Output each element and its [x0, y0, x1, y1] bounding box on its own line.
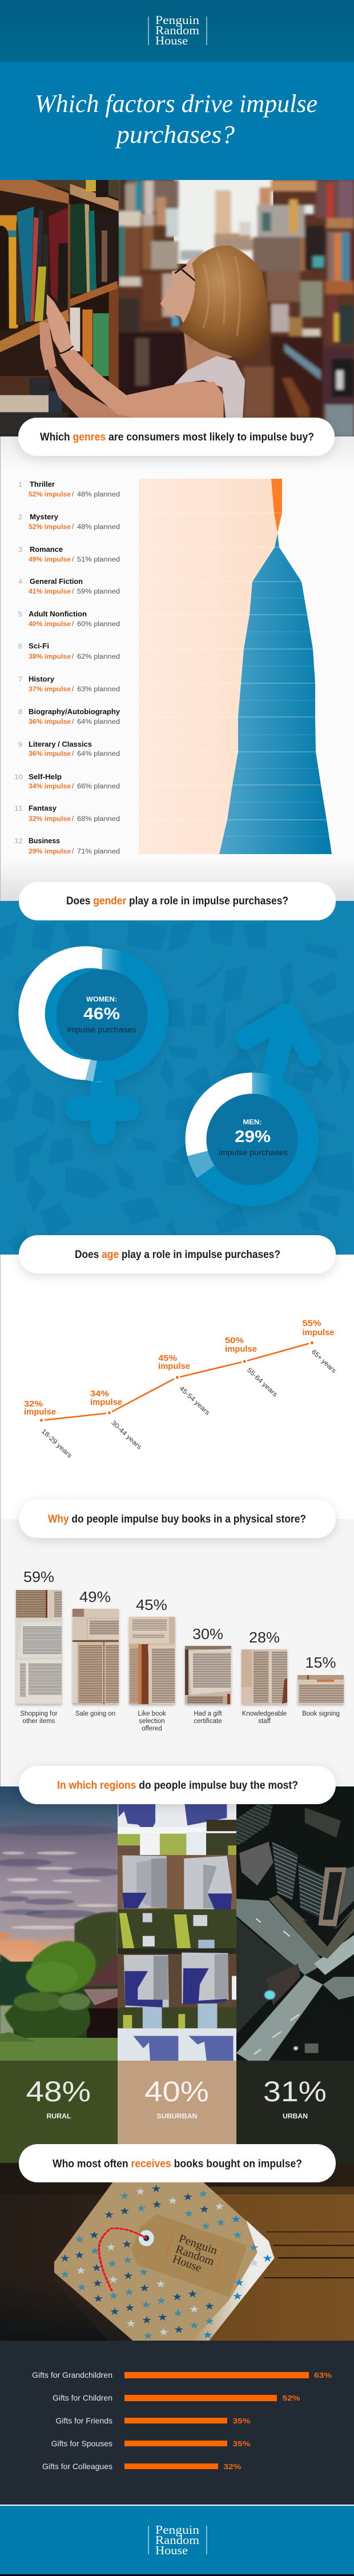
bar: selection 45%: offered	[142, 1725, 162, 1732]
bar: grandchildren: Gifts for Grandchildren	[32, 2370, 112, 2379]
genre 7: History	[29, 675, 55, 683]
photo bar chart: reasons	[16, 1568, 344, 1732]
panel: recipients	[0, 2341, 354, 2505]
genre 9: Literary / Classics	[29, 740, 92, 748]
tag text: Penguin	[177, 2232, 219, 2257]
stat: urban: 31%	[263, 2076, 327, 2108]
heading pill: genres	[18, 418, 335, 456]
genre 1: 52% impulse	[29, 491, 71, 498]
genre 5: /	[72, 621, 74, 628]
point labels: impulse	[158, 1362, 190, 1371]
woman: hair	[178, 246, 270, 363]
genre 10	[14, 772, 120, 790]
bar: gift 30%: certificate	[194, 1718, 222, 1725]
bar: selection 45%: 45%	[136, 1596, 167, 1613]
bar: friends: 35%	[233, 2417, 251, 2425]
woman: arms	[48, 367, 134, 418]
heading pill: age: Does age play a role in impulse purchases?	[75, 1248, 280, 1261]
driveways	[118, 2008, 236, 2009]
bar: staff 28%: staff	[258, 1718, 271, 1725]
stat: rural: RURAL	[47, 2112, 71, 2120]
genre 6: 6	[18, 642, 22, 650]
age axis labels: 18-29 years	[40, 1428, 73, 1460]
genre 8: Biography/Autobiography	[29, 707, 120, 716]
genre 5: Adult Nonfiction	[29, 610, 87, 618]
point labels: 45%	[158, 1354, 177, 1363]
roads	[236, 1899, 325, 1975]
header band	[0, 0, 354, 62]
point labels: 55%	[303, 1319, 321, 1328]
genre 1: 48% planned	[77, 491, 120, 498]
bar: signing 15%: Book signing	[302, 1710, 340, 1717]
bar: shopping 59%: 59%	[23, 1568, 54, 1585]
bar: staff 28%: 28%	[249, 1629, 280, 1646]
heading pill: gender: Does gender play a role in impulse purchases?	[66, 895, 288, 907]
genre 11: /	[72, 816, 74, 823]
heading pill: why	[19, 1500, 336, 1538]
genre 2	[18, 512, 120, 531]
twine	[99, 2228, 146, 2290]
genre 9: 64% planned	[77, 751, 120, 758]
men label: 29%	[235, 1128, 271, 1146]
genre 3: 3	[18, 546, 22, 554]
photo: woman browsing bookshelf	[0, 180, 354, 437]
photo: suburban houses	[118, 1786, 236, 2061]
genre 10: 34% impulse	[29, 783, 71, 790]
genre 2: /	[72, 524, 74, 531]
genre 12: 71% planned	[77, 848, 120, 855]
point labels: impulse	[303, 1328, 335, 1337]
genre 12: 29% impulse	[29, 848, 71, 855]
bar: friends: Gifts for Friends	[55, 2416, 112, 2425]
footer logo: Penguin	[155, 2523, 200, 2537]
age axis labels: 65+ years	[310, 1348, 337, 1375]
genre 10: Self-Help	[29, 772, 62, 781]
genre 5: 40% impulse	[29, 621, 71, 628]
genre 4: /	[72, 588, 74, 595]
heading pill: age	[19, 1235, 336, 1273]
blurred mid and far shelves	[118, 180, 354, 437]
house top right	[184, 1856, 232, 1909]
house bottom right	[182, 1953, 228, 2004]
bar: gift 30%: Had a gift	[194, 1710, 222, 1717]
tag text	[172, 2234, 216, 2271]
bar: friends	[55, 2416, 251, 2425]
panel: why section	[0, 1255, 354, 1786]
bar: selection 45%: Like book	[138, 1710, 166, 1717]
female gender symbol with donut	[18, 946, 168, 1145]
bar: shopping 59%: Shopping for	[20, 1710, 58, 1717]
male gender symbol with donut	[185, 1015, 319, 1207]
bar: spouses	[51, 2439, 251, 2448]
facade	[269, 1895, 354, 1959]
genre list	[14, 480, 120, 855]
bar: colleagues: Gifts for Colleagues	[42, 2462, 112, 2471]
heading pill: regions	[19, 1766, 336, 1804]
point labels: 32%	[24, 1400, 43, 1409]
book pattern	[0, 920, 354, 1251]
bar: colleagues: 32%	[223, 2462, 242, 2471]
genre 1	[18, 480, 120, 498]
genre 11	[14, 804, 120, 823]
genre 4	[18, 577, 120, 595]
bar: sale 49%: Sale going on	[75, 1710, 115, 1717]
genre 6: 62% planned	[77, 654, 120, 660]
genre 5: 60% planned	[77, 621, 120, 628]
panel: gender section	[0, 901, 354, 1255]
title	[35, 90, 317, 149]
genre 4: 59% planned	[77, 588, 120, 595]
genre 9: 9	[18, 740, 22, 748]
genre 3: 51% planned	[77, 556, 120, 563]
point labels: 50%	[225, 1336, 244, 1345]
genre 7	[18, 675, 120, 693]
women label: 46%	[83, 1005, 120, 1023]
stat: urban: URBAN	[283, 2112, 308, 2120]
bar chart: gift recipients	[32, 2370, 332, 2471]
footer logo: House	[155, 2543, 188, 2557]
bar: colleagues	[42, 2462, 242, 2471]
genre 12: /	[72, 848, 74, 855]
bar: signing 15%	[298, 1654, 344, 1717]
genre 10: 10	[14, 773, 23, 781]
genre 11: Fantasy	[29, 804, 57, 812]
bar: grandchildren: 63%	[314, 2371, 332, 2379]
house top left	[122, 1856, 167, 1908]
genre 9: /	[72, 751, 74, 758]
gift tag	[132, 2214, 247, 2297]
genre 3: 49% impulse	[29, 556, 71, 563]
books	[0, 215, 17, 328]
title: Which factors drive impulse	[35, 90, 317, 118]
stat: urban	[236, 2061, 354, 2163]
genre 4: 41% impulse	[29, 588, 71, 595]
point labels: impulse	[225, 1345, 257, 1354]
bar: sale 49%	[73, 1588, 119, 1717]
genre 7: /	[72, 686, 74, 693]
genre 12: Business	[29, 836, 60, 845]
heading pill: regions: In which regions do people impulse buy the most?	[57, 1779, 298, 1792]
genre 8: 8	[18, 708, 22, 716]
genre 1: 1	[18, 480, 22, 488]
package	[54, 2182, 274, 2341]
genre 1: Thriller	[30, 480, 55, 488]
photo: urban night	[236, 1786, 354, 2061]
stat: rural: 48%	[26, 2076, 91, 2108]
genre 9	[18, 740, 120, 758]
stat: suburban: SUBURBAN	[156, 2112, 198, 2120]
genre 8: 36% impulse	[29, 719, 71, 726]
genre 2: 2	[18, 513, 22, 521]
heading pill: recipients	[19, 2144, 336, 2182]
genre 2: 52% impulse	[29, 524, 71, 531]
tag text: House	[171, 2253, 203, 2274]
title panel	[0, 62, 354, 180]
chart: impulse vs planned area chart	[139, 479, 332, 854]
footer logo: Random	[155, 2533, 199, 2547]
bar: staff 28%: Knowledgeable	[242, 1710, 287, 1717]
foreground left shelves	[0, 187, 70, 437]
stat: rural	[0, 2061, 118, 2163]
age axis labels: 30-44 years	[110, 1419, 143, 1451]
woman: face	[160, 254, 199, 327]
genre 10: /	[72, 783, 74, 790]
heading pill: gender	[19, 882, 336, 920]
genre 2: 48% planned	[77, 524, 120, 531]
logo: Penguin Random House: Random	[155, 23, 199, 37]
genre 8: 64% planned	[77, 719, 120, 726]
bar: shopping 59%: other items	[23, 1718, 55, 1725]
stat: suburban	[118, 2061, 236, 2163]
heading pill: recipients: Who most often receives books bought on impulse?	[53, 2157, 302, 2170]
genre 8: /	[72, 719, 74, 726]
footer logo	[148, 2523, 207, 2557]
women label	[67, 995, 136, 1034]
genre 7: 63% planned	[77, 686, 120, 693]
point labels: impulse	[90, 1398, 122, 1407]
inner circle	[56, 969, 147, 1061]
genre 7: 7	[18, 675, 22, 683]
genre 7: 37% impulse	[29, 686, 71, 693]
bar: sale 49%: 49%	[79, 1588, 111, 1605]
age axis labels: 45-54 years	[178, 1385, 211, 1417]
genre 11: 11	[14, 804, 23, 812]
bar: children: 52%	[283, 2394, 300, 2402]
bar: spouses: 35%	[233, 2439, 251, 2448]
bar: grandchildren	[32, 2370, 332, 2379]
bar: selection 45%	[129, 1596, 175, 1732]
genre 12	[14, 836, 120, 855]
bar: children: Gifts for Children	[53, 2393, 112, 2402]
point labels: 34%	[90, 1389, 109, 1399]
genre 4: General Fiction	[30, 577, 83, 586]
men label: MEN:	[243, 1118, 262, 1126]
title: purchases?	[115, 121, 235, 149]
genre 8	[18, 707, 120, 726]
trees	[5, 1941, 96, 2042]
bar: signing 15%: 15%	[305, 1654, 336, 1671]
regional stats	[0, 2061, 354, 2163]
genre 6	[18, 642, 120, 660]
genre 3	[18, 545, 120, 563]
panel: age section	[0, 1255, 354, 1519]
genre 11: 68% planned	[77, 816, 120, 823]
genre 4: 4	[18, 578, 22, 586]
photo: rural barn	[0, 1786, 122, 2061]
genre 9: 36% impulse	[29, 751, 71, 758]
heading pill: why: Why do people impulse buy books in a physical store?	[48, 1513, 306, 1525]
photo: wrapped gift on wood	[0, 2163, 354, 2341]
tag text: Random	[174, 2243, 216, 2268]
point labels: impulse	[24, 1408, 56, 1417]
back tree mass	[74, 1912, 118, 1977]
bar: selection 45%: selection	[139, 1718, 165, 1725]
women label: WOMEN:	[86, 995, 117, 1003]
genre 12: 12	[14, 837, 23, 845]
bar: gift 30%	[185, 1625, 231, 1725]
genre 6: 38% impulse	[29, 654, 71, 660]
panel: genres section	[0, 436, 354, 901]
bar: children	[53, 2393, 300, 2402]
women label: impulse purchases	[67, 1025, 136, 1034]
bar: spouses: Gifts for Spouses	[51, 2439, 112, 2448]
house bottom left	[124, 1955, 169, 2008]
woman: neck	[184, 332, 232, 370]
genre 3: Romance	[30, 545, 63, 554]
men label	[219, 1118, 288, 1157]
bar: shopping 59%	[16, 1568, 62, 1725]
genre 2: Mystery	[30, 512, 59, 521]
footer band	[0, 2506, 354, 2574]
sky gap	[174, 180, 273, 264]
logo: Penguin Random House: House	[155, 34, 188, 47]
stars	[61, 2185, 214, 2333]
genre 6: Sci-Fi	[29, 642, 49, 650]
age axis labels	[40, 1348, 337, 1460]
age axis labels: 55-64 years	[246, 1367, 279, 1399]
logo: Penguin Random House: Penguin	[155, 13, 200, 27]
blocks	[236, 1918, 300, 2034]
woman: dress	[174, 356, 245, 418]
genre 3: /	[72, 556, 74, 563]
logo: Penguin Random House	[148, 13, 207, 47]
lawn	[119, 1913, 134, 1948]
genre 5	[18, 610, 120, 628]
heading pill: genres: Which genres are consumers most likely to impulse buy?	[40, 431, 314, 443]
genre 11: 32% impulse	[29, 816, 71, 823]
bar: staff 28%	[242, 1629, 287, 1725]
genre 6: /	[72, 654, 74, 660]
men label: impulse purchases	[219, 1148, 288, 1157]
point labels	[24, 1319, 335, 1417]
barn	[85, 1954, 118, 1986]
genre 10: 66% planned	[77, 783, 120, 790]
bar: gift 30%: 30%	[192, 1625, 223, 1642]
inner circle	[207, 1093, 298, 1185]
line chart: impulse by age	[24, 1319, 337, 1460]
genre 5: 5	[18, 610, 22, 618]
stat: suburban: 40%	[144, 2076, 209, 2108]
genre 1: /	[72, 491, 74, 498]
